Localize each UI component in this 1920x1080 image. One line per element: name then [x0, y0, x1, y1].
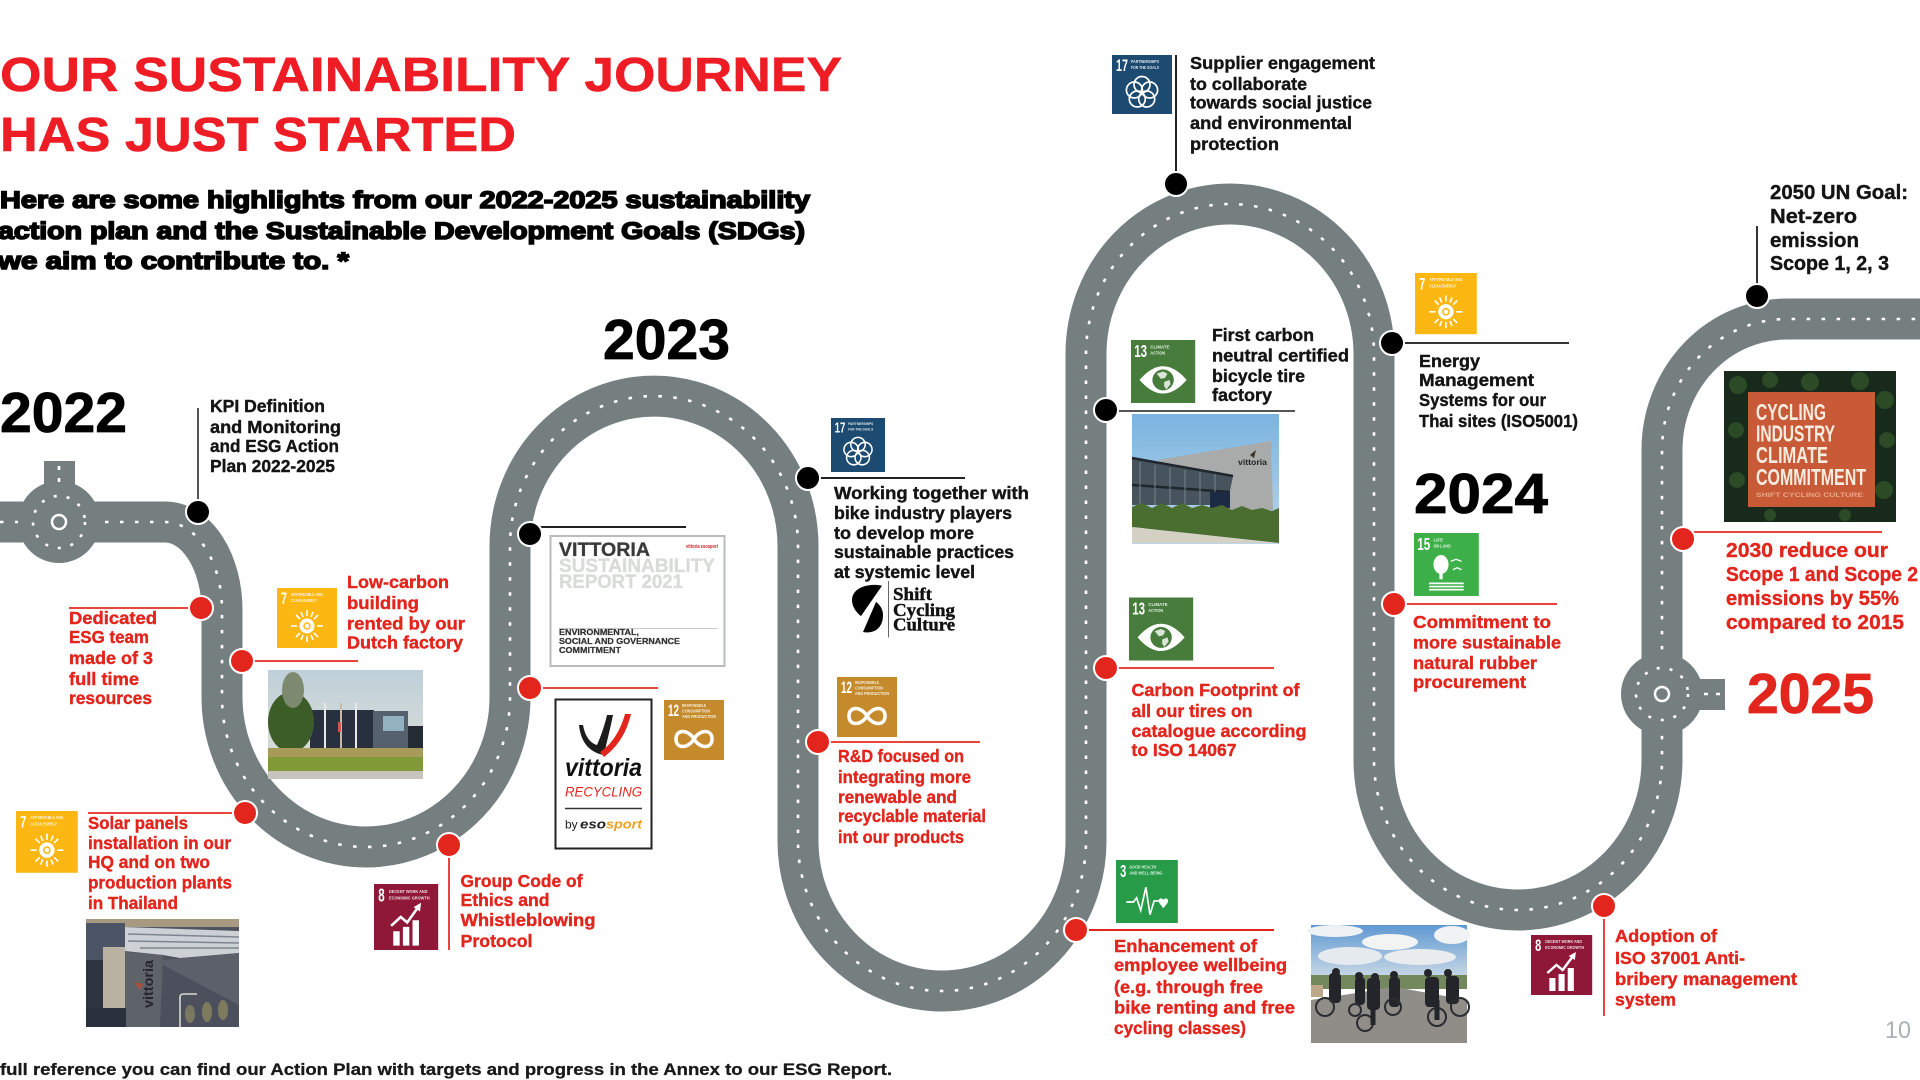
Shift Cycling Culture logo	[852, 581, 955, 638]
Cycling Industry Climate Commitment poster: CYCLING	[1756, 399, 1826, 425]
SDG 3 tile: wellbeing: GOOD HEALTH	[1129, 864, 1156, 869]
milestone: recycling marker	[518, 676, 658, 700]
milestone: ISO 37001: Adoption of	[1615, 926, 1717, 946]
SDG 12 tile: recycling: AND PRODUCTION	[682, 714, 716, 719]
photo: Vittoria factory	[1132, 414, 1279, 544]
year 2022: 2022	[0, 381, 127, 445]
milestone: low-carbon building: rented by our	[347, 614, 465, 634]
milestone: R&D recyclable material	[806, 730, 986, 847]
milestone: dedicated ESG team	[69, 596, 213, 708]
SDG 3 tile: wellbeing: AND WELL-BEING	[1129, 871, 1163, 876]
milestone: energy management: Energy	[1419, 351, 1480, 371]
milestone: KPI definition: KPI Definition	[210, 396, 325, 416]
SDG 17 tile: supplier	[1112, 55, 1172, 114]
milestone: 2050 UN goal: emission	[1770, 229, 1859, 252]
Vittoria recycling card: eso	[580, 816, 606, 832]
roundabout: 2022 start	[18, 461, 100, 563]
SDG 8 tile: ethics: 8	[378, 885, 385, 906]
SDG 7 tile: solar: 7	[20, 812, 26, 831]
milestone: carbon footprint: Carbon Footprint of	[1132, 680, 1300, 700]
milestone: low-carbon building	[230, 572, 465, 673]
milestone: working together with bike industry: sustainable practices	[834, 542, 1014, 562]
milestone: carbon footprint	[1094, 656, 1306, 760]
SDG 7 tile: energy: AFFORDABLE AND	[1429, 277, 1462, 282]
SDG 12 tile: recycling	[664, 700, 724, 760]
report cover card	[550, 536, 724, 666]
SDG 7 tile: solar	[16, 811, 78, 873]
milestone: solar panels: in Thailand	[88, 893, 178, 913]
milestone: dedicated ESG team: ESG team	[69, 627, 149, 647]
photo: employees cycling	[1307, 925, 1470, 1043]
milestone: first carbon neutral factory: bicycle tire	[1212, 366, 1305, 386]
roundabout: 2025	[1621, 653, 1725, 735]
SDG 7 tile: energy: CLEAN ENERGY	[1429, 283, 1456, 288]
milestone: dedicated ESG team: resources	[69, 688, 152, 708]
SDG 13 tile: carbon footprint: 13	[1132, 598, 1145, 618]
title	[0, 49, 842, 162]
milestone: supplier engagement: protection	[1190, 134, 1279, 154]
SDG 17 tile: supplier: 17	[1116, 57, 1128, 75]
SDG 17 tile: supplier: PARTNERSHIPS	[1131, 59, 1159, 64]
footnote: full reference you can find our Action Plan with targets and progress in the Annex to our ESG Report.	[0, 1060, 892, 1079]
report cover card: vittoria esosport	[686, 544, 718, 550]
milestone: KPI definition: and ESG Action	[210, 436, 339, 456]
milestone: ISO 37001	[1592, 894, 1797, 1016]
Shift Cycling Culture logo: Cycling	[893, 600, 955, 620]
SDG 15 tile: rubber	[1414, 533, 1479, 596]
SDG 17 tile: bike industry	[831, 418, 885, 472]
milestone: R&D recyclable material: recyclable material	[838, 806, 986, 826]
milestone: 2050 UN goal	[1745, 181, 1908, 308]
subtitle	[0, 187, 810, 275]
milestone: low-carbon building: building	[347, 593, 419, 613]
SDG 8 tile: ethics: DECENT WORK AND	[389, 889, 428, 894]
SDG 13 tile: factory: 13	[1134, 341, 1147, 361]
Vittoria recycling card: vittoria	[565, 754, 642, 782]
milestone: KPI definition: Plan 2022-2025	[210, 456, 335, 476]
milestone: natural rubber: Commitment to	[1413, 612, 1551, 632]
milestone: employee wellbeing: bike renting and free	[1114, 998, 1295, 1018]
milestone: natural rubber: more sustainable	[1413, 632, 1561, 652]
SDG 8 tile: ethics	[374, 884, 438, 950]
report cover card: SUSTAINABILITY	[559, 556, 715, 577]
milestone: working together with bike industry: to develop more	[834, 523, 974, 543]
SDG 13 tile: carbon footprint: CLIMATE	[1148, 602, 1168, 607]
SDG 8 tile: ethics: ECONOMIC GROWTH	[389, 895, 430, 900]
milestone: natural rubber: procurement	[1413, 672, 1526, 692]
SDG 17 tile: bike industry: 17	[835, 420, 845, 436]
Shift Cycling Culture logo: Shift	[893, 584, 932, 604]
title: HAS JUST STARTED	[0, 109, 516, 162]
photo: solar roof: vittoria	[140, 960, 156, 1008]
milestone: group code of ethics: Group Code of	[460, 871, 583, 891]
Cycling Industry Climate Commitment poster: COMMITMENT	[1756, 464, 1866, 490]
photo: Dutch factory	[268, 670, 423, 779]
milestone: natural rubber	[1382, 592, 1561, 692]
milestone: solar panels: Solar panels	[88, 813, 188, 833]
milestone: group code of ethics: Protocol	[460, 931, 532, 951]
milestone: 2030 target	[1671, 527, 1918, 634]
road: winding journey from 2022 to 2050	[0, 204, 1920, 991]
Cycling Industry Climate Commitment poster: CLIMATE	[1756, 442, 1828, 468]
milestone: supplier engagement: Supplier engagement	[1190, 53, 1375, 73]
SDG 3 tile: wellbeing: 3	[1120, 861, 1126, 881]
SDG 7 tile: low-carbon: 7	[281, 590, 287, 608]
report cover card: VITTORIA	[559, 540, 650, 561]
milestone: employee wellbeing	[1064, 918, 1295, 1038]
milestone: R&D recyclable material: int our products	[838, 827, 964, 847]
milestone: low-carbon building: Low-carbon	[347, 572, 449, 592]
milestone: group code of ethics: Ethics and	[460, 890, 550, 910]
SDG 7 tile: energy	[1415, 273, 1477, 334]
Cycling Industry Climate Commitment poster: SHIFT CYCLING CULTURE	[1756, 492, 1864, 499]
milestone: working together with bike industry	[796, 466, 1029, 582]
milestone: 2030 target: 2030 reduce our	[1726, 539, 1888, 562]
SDG 8 tile: ISO 37001: 8	[1535, 936, 1541, 955]
milestone: supplier engagement: and environmental	[1190, 113, 1352, 133]
title: OUR SUSTAINABILITY JOURNEY	[0, 49, 842, 102]
SDG 7 tile: solar: CLEAN ENERGY	[30, 821, 57, 826]
year 2024: 2024	[1414, 462, 1548, 526]
milestone: energy management	[1380, 331, 1578, 431]
SDG 17 tile: bike industry: FOR THE GOALS	[848, 427, 874, 432]
Vittoria recycling card: by	[565, 818, 578, 832]
SDG 13 tile: carbon footprint: ACTION	[1148, 608, 1163, 613]
year 2025: 2025	[1747, 662, 1874, 726]
SDG 15 tile: rubber: 15	[1417, 534, 1430, 554]
SDG 13 tile: factory	[1131, 340, 1195, 403]
SDG 12 tile: R&D: 12	[841, 679, 852, 697]
SDG 8 tile: ISO 37001: ECONOMIC GROWTH	[1545, 945, 1584, 950]
milestone: employee wellbeing: cycling classes)	[1114, 1018, 1246, 1038]
SDG 17 tile: bike industry: PARTNERSHIPS	[848, 421, 874, 426]
SDG 7 tile: low-carbon	[277, 588, 337, 648]
milestone: solar panels	[88, 801, 257, 913]
report cover card: REPORT 2021	[559, 572, 683, 593]
SDG 12 tile: R&D: AND PRODUCTION	[855, 691, 889, 696]
year 2023: 2023	[603, 308, 730, 372]
report cover card: SOCIAL AND GOVERNANCE	[559, 636, 680, 646]
SDG 12 tile: R&D: CONSUMPTION	[855, 686, 883, 690]
page number: 10	[1885, 1017, 1911, 1044]
Vittoria recycling card: RECYCLING	[565, 784, 642, 800]
milestone: R&D recyclable material: integrating more	[838, 767, 971, 787]
SDG 7 tile: low-carbon: CLEAN ENERGY	[291, 598, 317, 603]
milestone: R&D recyclable material: R&D focused on	[838, 746, 964, 766]
logo swoosh	[579, 714, 631, 757]
milestone: 2050 UN goal: Net-zero	[1770, 205, 1857, 228]
milestone: 2030 target: emissions by 55%	[1726, 587, 1899, 610]
milestone: first carbon neutral factory: First carbon	[1212, 325, 1314, 345]
milestone: carbon footprint: catalogue according	[1132, 721, 1306, 741]
SDG 15 tile: rubber: ON LAND	[1433, 544, 1451, 549]
milestone: group code of ethics: Whistleblowing	[460, 910, 596, 930]
SDG 12 tile: R&D: RESPONSIBLE	[855, 680, 879, 685]
SDG 13 tile: factory: CLIMATE	[1150, 344, 1170, 349]
SDG 13 tile: carbon footprint	[1129, 598, 1193, 660]
SDG 8 tile: ISO 37001: DECENT WORK AND	[1545, 939, 1582, 944]
milestone: dedicated ESG team: Dedicated	[69, 608, 157, 628]
subtitle: action plan and the Sustainable Development Goals (SDGs)	[0, 218, 805, 245]
SDG 8 tile: ISO 37001	[1531, 935, 1592, 995]
milestone: first carbon neutral factory: factory	[1212, 385, 1272, 405]
SDG 12 tile: R&D	[837, 677, 897, 737]
milestone: employee wellbeing: Enhancement of	[1114, 936, 1257, 956]
SDG 12 tile: recycling: 12	[668, 702, 679, 720]
milestone: natural rubber: natural rubber	[1413, 653, 1537, 673]
SDG 12 tile: recycling: RESPONSIBLE	[682, 703, 706, 708]
milestone: first carbon neutral factory	[1094, 325, 1349, 422]
milestone: ISO 37001: system	[1615, 990, 1676, 1010]
SDG 13 tile: factory: ACTION	[1150, 351, 1165, 356]
milestone: energy management: Management	[1419, 370, 1534, 390]
milestone: energy management: Systems for our	[1419, 390, 1546, 410]
milestone: 2030 target: compared to 2015	[1726, 611, 1904, 634]
milestone: carbon footprint: all our tires on	[1132, 701, 1252, 721]
Vittoria recycling card: sport	[606, 816, 643, 832]
milestone: employee wellbeing: (e.g. through free	[1114, 977, 1263, 997]
Shift Cycling Culture logo: Culture	[893, 615, 955, 635]
photo: Vittoria factory: vittoria	[1238, 457, 1267, 467]
milestone: group code of ethics	[437, 833, 596, 951]
Cycling Industry Climate Commitment poster	[1724, 371, 1896, 522]
milestone: working together with bike industry: at systemic level	[834, 562, 975, 582]
milestone: working together with bike industry: bike industry players	[834, 503, 1012, 523]
milestone: solar panels: production plants	[88, 872, 232, 892]
milestone: solar panels: installation in our	[88, 833, 231, 853]
milestone: 2050 UN goal: Scope 1, 2, 3	[1770, 252, 1889, 275]
subtitle: Here are some highlights from our 2022-2025 sustainability	[0, 187, 810, 214]
milestone: 2050 UN goal: 2050 UN Goal:	[1770, 181, 1908, 204]
milestone: KPI definition: and Monitoring	[210, 417, 341, 437]
milestone: energy management: Thai sites (ISO5001)	[1419, 411, 1578, 431]
SDG 17 tile: supplier: FOR THE GOALS	[1131, 65, 1159, 70]
milestone: supplier engagement: towards social justice	[1190, 92, 1372, 112]
SDG 7 tile: solar: AFFORDABLE AND	[30, 815, 63, 820]
report cover card: COMMITMENT	[559, 645, 622, 655]
milestone: R&D recyclable material: renewable and	[838, 787, 957, 807]
milestone: supplier engagement: to collaborate	[1190, 74, 1307, 94]
Cycling Industry Climate Commitment poster: INDUSTRY	[1756, 421, 1835, 447]
SDG 12 tile: recycling: CONSUMPTION	[682, 708, 710, 714]
report cover card: ENVIRONMENTAL,	[559, 627, 639, 637]
milestone: supplier engagement	[1164, 53, 1375, 196]
milestone: first carbon neutral factory: neutral certified	[1212, 346, 1349, 366]
SDG 7 tile: energy: 7	[1419, 274, 1425, 293]
milestone: dedicated ESG team: full time	[69, 669, 139, 689]
milestone: employee wellbeing: employee wellbeing	[1114, 955, 1287, 975]
milestone: carbon footprint: to ISO 14067	[1132, 740, 1236, 760]
photo: solar roof	[86, 919, 239, 1027]
milestone: working together with bike industry: Working together with	[834, 483, 1029, 503]
SDG 15 tile: rubber: LIFE	[1433, 537, 1443, 542]
subtitle: we aim to contribute to. *	[0, 248, 350, 275]
milestone: dedicated ESG team: made of 3	[69, 648, 153, 668]
Vittoria recycling card	[556, 700, 652, 848]
milestone: KPI definition	[186, 396, 341, 524]
milestone: report	[518, 522, 686, 546]
SDG 7 tile: low-carbon: AFFORDABLE AND	[291, 592, 323, 597]
milestone: low-carbon building: Dutch factory	[347, 632, 463, 652]
SDG 3 tile: wellbeing	[1116, 860, 1178, 923]
milestone: ISO 37001: ISO 37001 Anti-	[1615, 948, 1745, 968]
milestone: solar panels: HQ and on two	[88, 852, 210, 872]
milestone: ISO 37001: bribery management	[1615, 969, 1797, 989]
